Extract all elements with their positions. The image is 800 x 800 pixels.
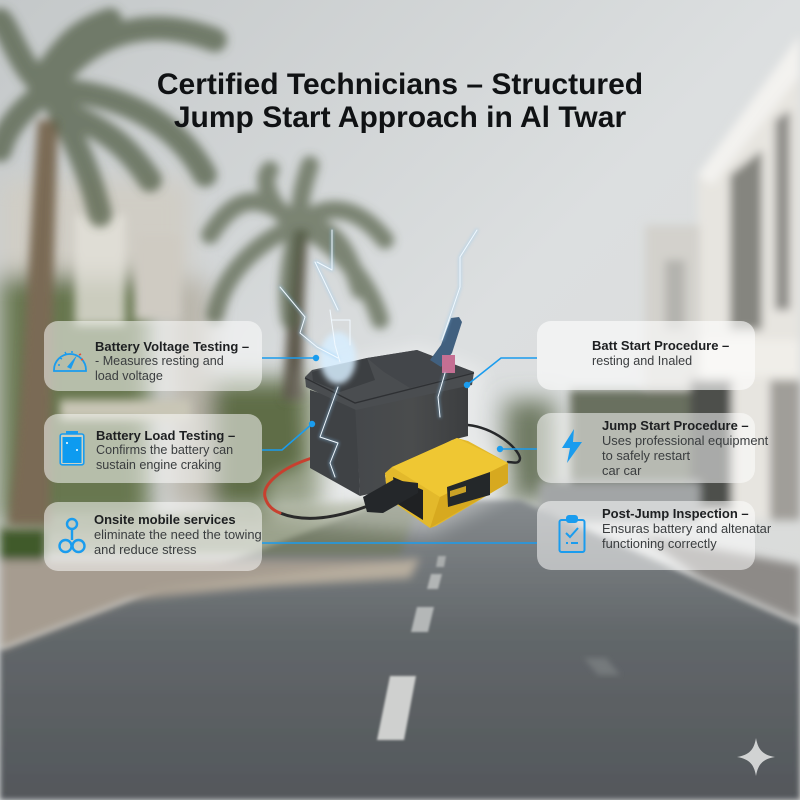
text: battery load testing: Battery Load Testing – bbox=[96, 428, 235, 443]
car battery bbox=[305, 317, 474, 496]
text: battery load testing bbox=[96, 428, 235, 472]
text: onsite mobile services: and reduce stress bbox=[94, 542, 196, 557]
title bbox=[157, 68, 643, 134]
text: jump start procedure: Uses professional equipment bbox=[602, 433, 768, 448]
panel: jump start procedure bbox=[537, 413, 755, 483]
text: jump start procedure: Jump Start Procedure – bbox=[602, 418, 749, 433]
panel: onsite mobile services bbox=[44, 502, 262, 571]
panel: battery voltage testing bbox=[44, 321, 262, 391]
text: batt start procedure bbox=[592, 338, 729, 368]
white halo behind product bbox=[265, 345, 515, 535]
connector dots bbox=[309, 355, 503, 452]
text: post-jump inspection: Post-Jump Inspection – bbox=[602, 506, 749, 521]
text: battery load testing: sustain engine craking bbox=[96, 458, 221, 472]
text: post-jump inspection: Ensuras battery and altenatar bbox=[602, 521, 771, 536]
text: jump start procedure bbox=[602, 418, 768, 478]
text: battery voltage testing: - Measures resting and bbox=[95, 354, 224, 368]
text: batt start procedure: resting and Inaled bbox=[592, 354, 692, 368]
text: battery voltage testing bbox=[95, 339, 249, 383]
watermark sparkle bbox=[737, 738, 775, 776]
text: onsite mobile services: eliminate the need the towing bbox=[94, 527, 262, 542]
text: onsite mobile services bbox=[94, 512, 262, 557]
connector lines bbox=[262, 358, 537, 543]
icon: clipboard checklist bbox=[558, 515, 586, 553]
panel: post-jump inspection bbox=[537, 501, 755, 570]
electric sparks bbox=[280, 230, 477, 477]
icon: battery bbox=[59, 431, 85, 466]
text: post-jump inspection bbox=[602, 506, 771, 551]
panel: battery load testing bbox=[44, 414, 262, 483]
road bbox=[0, 500, 800, 800]
title: Jump Start Approach in Al Twar bbox=[174, 101, 626, 134]
road lane markings bbox=[377, 556, 446, 740]
text: battery voltage testing: Battery Voltage Testing – bbox=[95, 339, 249, 354]
icon: nodes bbox=[58, 518, 86, 554]
right building bbox=[698, 35, 800, 520]
icon: gauge bbox=[53, 351, 87, 372]
panel: batt start procedure bbox=[537, 321, 755, 390]
text: jump start procedure: car car bbox=[602, 463, 641, 478]
text: post-jump inspection: functioning correctly bbox=[602, 536, 717, 551]
text: batt start procedure: Batt Start Procedure – bbox=[592, 338, 729, 353]
text: battery load testing: Confirms the battery can bbox=[96, 443, 233, 457]
text: battery voltage testing: load voltage bbox=[95, 369, 163, 383]
left building highlights bbox=[75, 215, 125, 325]
charger bbox=[363, 438, 508, 528]
title: Certified Technicians – Structured bbox=[157, 68, 643, 101]
text: jump start procedure: to safely restart bbox=[602, 448, 690, 463]
icon: lightning bolt bbox=[562, 429, 582, 463]
palm trees bbox=[0, 20, 385, 525]
jump cables bbox=[265, 425, 520, 518]
text: onsite mobile services: Onsite mobile services bbox=[94, 512, 236, 527]
